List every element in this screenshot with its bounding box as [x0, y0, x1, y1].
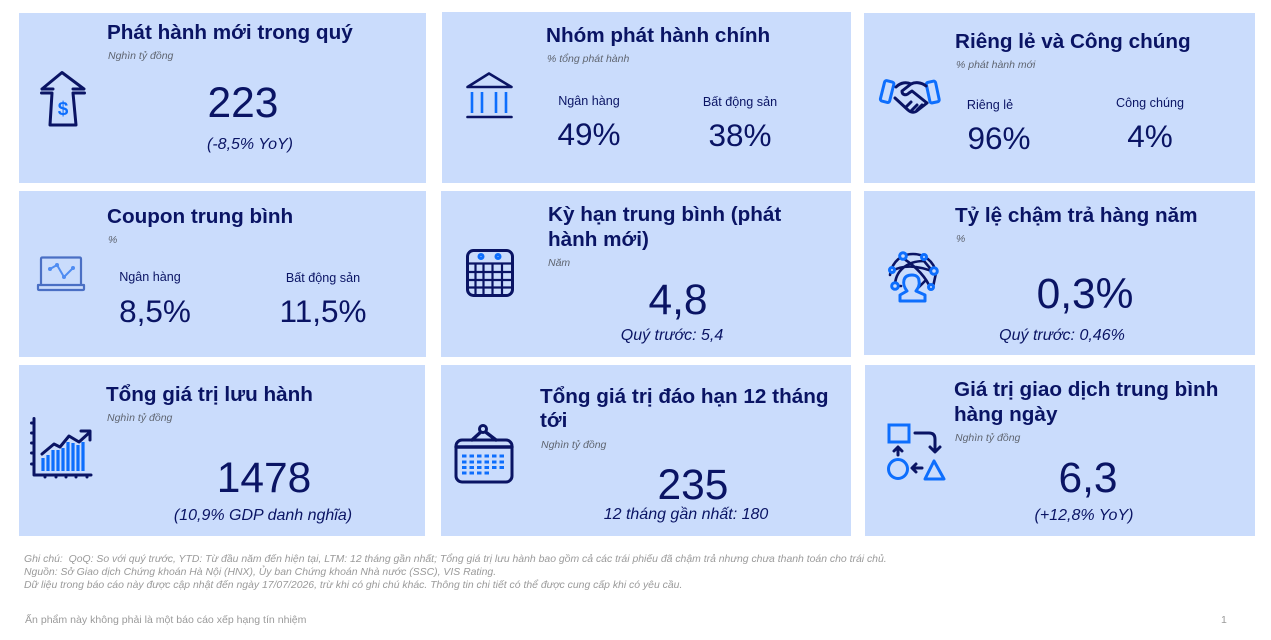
- caption: YoY: (-8,5% YoY): [207, 136, 293, 153]
- heading: maturing value second line: tới: [540, 409, 567, 432]
- value: private share: 96%: [967, 120, 1031, 156]
- panel: maturing in 12 months: [441, 365, 851, 536]
- footnote: notes: Ghi chú: QoQ: So với quý trước, YTD: Từ đầu năm đến hiện tại, LTM: 12 tháng gần nhất; Tổng giá trị lưu hành bao gồm cả các trái phiếu đã chậm trả nhưng chưa thanh toán cho trái chủ.: [24, 554, 887, 565]
- subheading: daily trading unit: Nghìn tỷ đồng: [955, 432, 1020, 444]
- value: banks coupon: 8,5%: [119, 293, 191, 329]
- icon: hanging calendar: [454, 424, 514, 484]
- value: public share: 4%: [1127, 118, 1173, 154]
- icon: bar chart with rising arrow: [30, 417, 92, 478]
- heading: average daily trading value: Giá trị giao dịch trung bình: [954, 378, 1218, 401]
- label: public: Công chúng: [1116, 96, 1184, 110]
- subheading: default rate unit: %: [956, 233, 965, 245]
- value: 4,8: 4,8: [648, 277, 708, 324]
- footnote: source: Nguồn: Sở Giao dịch Chứng khoán Hà Nội (HNX), Ủy ban Chứng khoán Nhà nước (SSC), VIS Rating.: [24, 567, 496, 578]
- panel: average daily trading value: [865, 365, 1255, 536]
- label: real estate: Bất động sản: [703, 95, 777, 109]
- heading: main issuers: Nhóm phát hành chính: [546, 24, 770, 47]
- heading: new issuance: Phát hành mới trong quý: [107, 21, 353, 44]
- value: 1478: 1478: [217, 455, 311, 502]
- label: real estate coupon: Bất động sản: [286, 271, 360, 285]
- icon: calendar grid: [466, 249, 514, 297]
- page number: 1: [1221, 614, 1227, 626]
- value: 223: 223: [208, 80, 278, 127]
- heading: outstanding value: Tổng giá trị lưu hành: [106, 383, 313, 406]
- subheading: main issuers unit: % tổng phát hành: [547, 53, 629, 65]
- label: banks coupon: Ngân hàng: [119, 270, 181, 284]
- icon: shapes flow: [887, 424, 946, 480]
- footnote: data date: Dữ liệu trong báo cáo này được cập nhật đến ngày 17/07/2026, trừ khi có ghi chú khác. Thông tin chi tiết có thể được cung cấp khi có yêu cầu.: [24, 580, 682, 591]
- caption: share of nominal GDP: (10,9% GDP danh nghĩa): [174, 507, 352, 524]
- icon: bank building: [466, 72, 513, 118]
- heading: private and public: Riêng lẻ và Công chúng: [955, 30, 1191, 53]
- value: real estate coupon: 11,5%: [280, 293, 366, 329]
- panel: new issuance: [19, 13, 426, 183]
- panel: main issuers: [442, 12, 851, 183]
- caption: previous quarter default: Quý trước: 0,46%: [999, 327, 1125, 344]
- icon: up arrow with dollar: [40, 71, 86, 126]
- panel: outstanding value: [19, 365, 425, 536]
- panel: average coupon: [19, 191, 426, 357]
- subheading: coupon unit: %: [108, 234, 117, 246]
- caption: previous quarter: Quý trước: 5,4: [621, 327, 723, 344]
- subheading: maturing unit: Nghìn tỷ đồng: [541, 439, 606, 451]
- value: 235: 235: [658, 462, 728, 509]
- heading: average coupon: Coupon trung bình: [107, 205, 293, 228]
- heading: maturing value: Tổng giá trị đáo hạn 12 tháng: [540, 385, 828, 408]
- caption: last 12 months: 12 tháng gần nhất: 180: [604, 506, 768, 523]
- disclaimer: Ấn phẩm này không phải là một báo cáo xếp hạng tín nhiệm: [25, 614, 306, 626]
- icon: network person: [888, 251, 939, 302]
- value: 0,3%: 0,3%: [1037, 271, 1133, 318]
- caption: daily YoY: (+12,8% YoY): [1035, 507, 1133, 524]
- value: 6,3: 6,3: [1058, 455, 1118, 502]
- heading: average tenor: Kỳ hạn trung bình (phát: [548, 203, 781, 226]
- subheading: tenor unit: Năm: [548, 257, 570, 269]
- heading: average daily trading value second line: hàng ngày: [954, 403, 1057, 426]
- value: real estate share: 38%: [708, 117, 772, 153]
- subheading: private and public unit: % phát hành mới: [956, 59, 1035, 71]
- panel: average tenor: [441, 191, 851, 357]
- subheading: new issuance unit: Nghìn tỷ đồng: [108, 50, 173, 62]
- icon: handshake: [878, 79, 941, 114]
- icon: laptop with line chart: [36, 256, 86, 292]
- value: banks share: 49%: [557, 116, 621, 152]
- label: banks: Ngân hàng: [558, 94, 620, 108]
- label: private: Riêng lẻ: [967, 98, 1013, 112]
- subheading: outstanding unit: Nghìn tỷ đồng: [107, 412, 172, 424]
- icon: up arrow with dollar: $: [58, 99, 69, 120]
- heading: average tenor second line: hành mới): [548, 228, 649, 251]
- heading: default rate: Tỷ lệ chậm trả hàng năm: [955, 204, 1198, 227]
- panel: annual default rate: [864, 191, 1255, 355]
- panel: private and public: [864, 13, 1255, 183]
